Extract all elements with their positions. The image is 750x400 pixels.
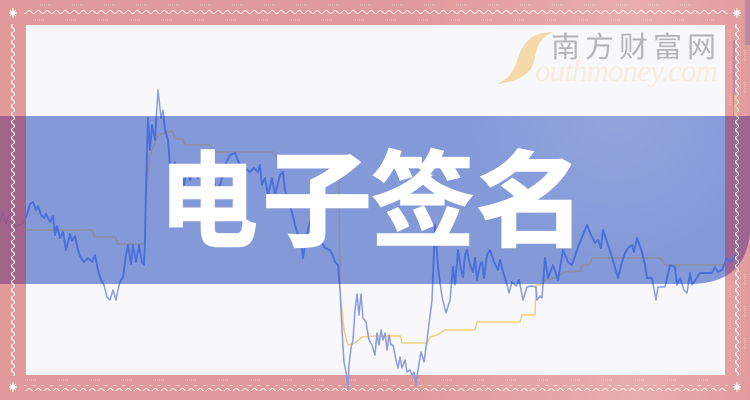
logo domain: outhmoney.com xyxy=(535,53,718,88)
title: 子 xyxy=(262,118,372,268)
title xyxy=(159,117,586,269)
logo swoosh S xyxy=(497,32,553,84)
title: 名 xyxy=(476,118,586,268)
title: 电 xyxy=(159,118,258,269)
title: 签 xyxy=(371,117,475,268)
logo chinese name: 南方财富网 xyxy=(551,24,721,66)
price and moving average lines on white xyxy=(26,90,736,390)
watermark logo xyxy=(497,24,721,88)
blue title band xyxy=(0,116,750,284)
